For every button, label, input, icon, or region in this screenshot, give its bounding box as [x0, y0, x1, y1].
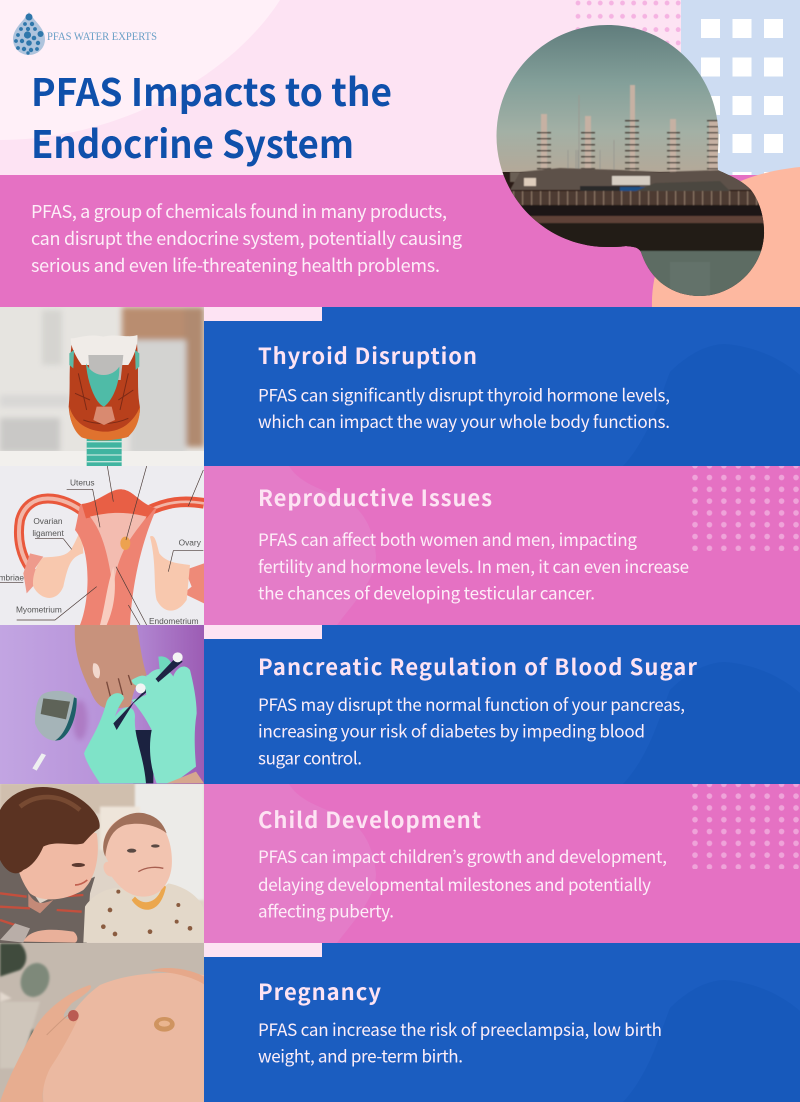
- heading: Thyroid Disruption: [258, 339, 477, 371]
- icon: patient hand: [75, 625, 147, 709]
- photo: industrial plant in blob: [490, 20, 770, 302]
- body text: which can impact the way your whole body functions.: [258, 408, 670, 433]
- panel: pancreatic regulation of blood sugar: [204, 625, 800, 784]
- image: uterus diagram: Endometrium: [149, 616, 199, 626]
- decorative dot grid: [573, 0, 681, 60]
- older child shirt: [0, 860, 95, 943]
- image: uterus diagram: Uterus: [70, 478, 95, 488]
- body text: fertility and hormone levels. In men, it can even increase: [258, 553, 689, 578]
- body text: weight, and pre-term birth.: [258, 1042, 463, 1068]
- heading: Reproductive Issues: [258, 481, 492, 513]
- panel: pregnancy: [204, 943, 800, 1102]
- tower scaffolding: [536, 119, 718, 170]
- body text: PFAS can affect both women and men, impacting: [258, 526, 637, 551]
- title: Endocrine System: [31, 114, 354, 169]
- logo: [13, 12, 157, 55]
- body text: [258, 382, 670, 433]
- peach shape: [652, 167, 800, 307]
- body text: sugar control.: [258, 744, 362, 770]
- panel: thyroid disruption: [204, 307, 800, 466]
- image: uterus diagram: Ovary: [179, 538, 202, 548]
- heading: Child Development: [258, 803, 481, 835]
- icon: gloved hands: [84, 693, 146, 783]
- body text: delaying developmental milestones and potentially: [258, 871, 651, 896]
- icon: lancet: [113, 657, 183, 730]
- intro band: [0, 175, 800, 307]
- body text: PFAS may disrupt the normal function of your pancreas,: [258, 691, 685, 716]
- body text: PFAS can impact children’s growth and development,: [258, 843, 667, 868]
- body text: [258, 843, 667, 922]
- body text: [258, 526, 689, 604]
- image: pregnant belly: [0, 943, 204, 1102]
- logo wordmark: PFAS WATER EXPERTS: [47, 31, 157, 43]
- intro text: can disrupt the endocrine system, potentially causing: [31, 225, 462, 251]
- title: PFAS Impacts to the: [31, 62, 392, 117]
- baby onesie: [83, 883, 204, 943]
- panel: reproductive issues: [204, 466, 800, 625]
- towers: [541, 85, 718, 180]
- older child hair: [0, 787, 100, 873]
- image: uterus diagram: Ovarian: [33, 516, 63, 526]
- image: uterus diagram: [0, 466, 204, 626]
- baby head: [103, 814, 172, 897]
- intro text: serious and even life-threatening health problems.: [31, 252, 440, 278]
- body text: affecting puberty.: [258, 898, 394, 922]
- body text: PFAS can increase the risk of preeclampsia, low birth: [258, 1016, 662, 1041]
- heading: Pancreatic Regulation of Blood Sugar: [258, 650, 697, 682]
- image: blood glucose test: [0, 625, 204, 784]
- image: uterus diagram: ligament: [32, 528, 64, 538]
- header background: [0, 0, 800, 175]
- body text: the chances of developing testicular cancer.: [258, 580, 595, 604]
- intro text: [31, 198, 462, 278]
- body text: PFAS can significantly disrupt thyroid hormone levels,: [258, 382, 670, 406]
- icon: glucose meter: [73, 700, 87, 740]
- body text: [258, 691, 685, 770]
- image: thyroid model: [0, 307, 204, 466]
- pale blue panel with white squares: [681, 0, 800, 175]
- intro text: PFAS, a group of chemicals found in many products,: [31, 198, 447, 224]
- image: two children: [0, 783, 204, 943]
- icon: water drop of bubbles: [13, 12, 45, 55]
- heading: Pregnancy: [258, 975, 381, 1007]
- older child face: [16, 831, 98, 899]
- body text: increasing your risk of diabetes by impeding blood: [258, 718, 645, 742]
- image: uterus diagram: Myometrium: [16, 605, 62, 615]
- body text: [258, 1016, 662, 1068]
- panel: child development: [204, 784, 800, 943]
- title: [31, 62, 392, 169]
